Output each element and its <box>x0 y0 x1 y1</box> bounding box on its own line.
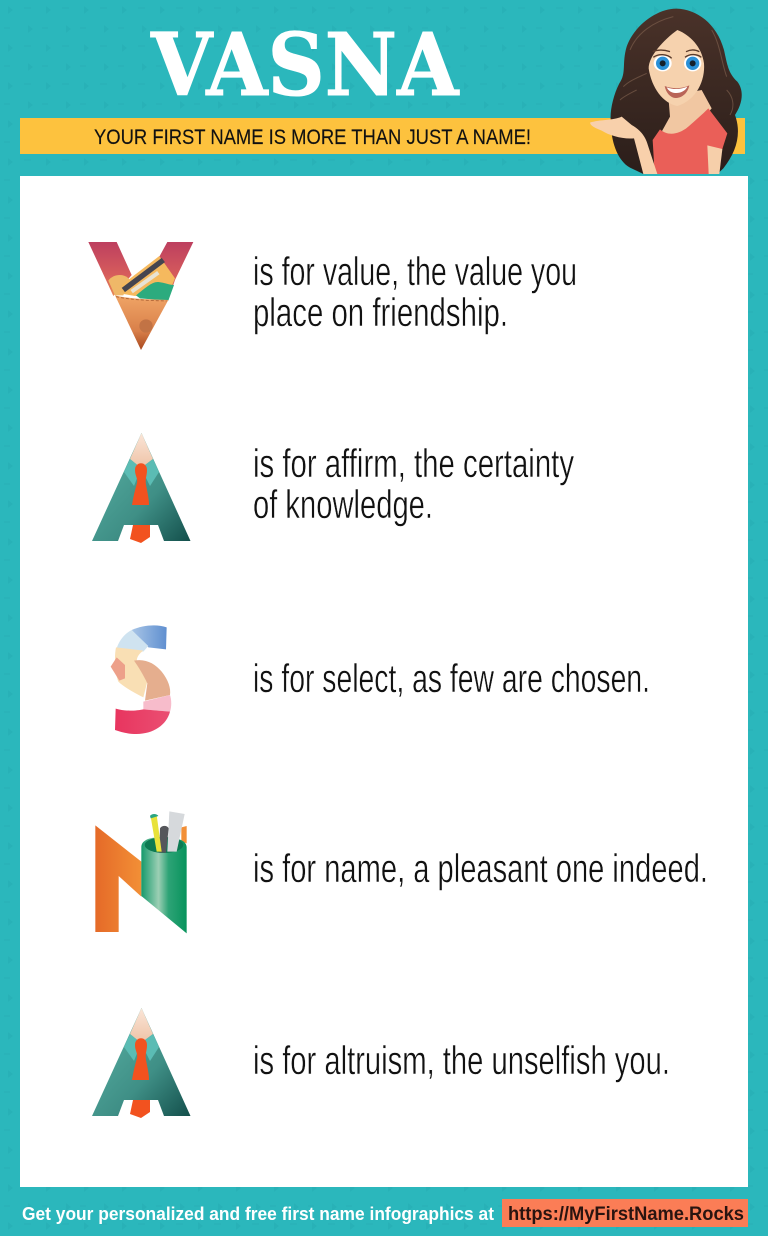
subtitle banner <box>20 118 745 154</box>
arm and hand <box>590 117 657 174</box>
url badge: https://MyFirstName.Rocks <box>508 1204 744 1225</box>
white content panel <box>20 176 748 1187</box>
icon: letter N with pencil holder <box>95 811 187 933</box>
title: VASNA <box>150 15 460 116</box>
face <box>649 30 704 106</box>
hair <box>611 9 742 174</box>
row 4 <box>95 811 708 933</box>
text: is for value, the value you <box>253 250 577 294</box>
row 1 <box>88 242 577 350</box>
footer: Get your personalized and free first name infographics at <box>22 1204 494 1224</box>
icon: letter A with tie <box>92 1008 190 1118</box>
icon: letter S with handshake <box>111 625 171 734</box>
row 3 <box>111 625 650 734</box>
subtitle banner: YOUR FIRST NAME IS MORE THAN JUST A NAME! <box>94 126 531 149</box>
icon: letter V with wallet <box>88 242 193 350</box>
neck and chest <box>662 90 712 137</box>
row 2 second line: of knowledge. <box>253 483 433 527</box>
row 1 second line: place on friendship. <box>253 291 508 335</box>
icon: letter A with tie <box>92 433 190 543</box>
text: is for affirm, the certainty <box>253 442 574 486</box>
smile <box>665 85 689 98</box>
eyes <box>653 50 701 71</box>
row 5 <box>92 1008 670 1118</box>
illustration: cartoon woman <box>590 9 742 174</box>
red top <box>653 108 727 174</box>
row 2 <box>92 433 574 543</box>
footer <box>22 1199 748 1227</box>
viewer right arm <box>705 143 723 174</box>
